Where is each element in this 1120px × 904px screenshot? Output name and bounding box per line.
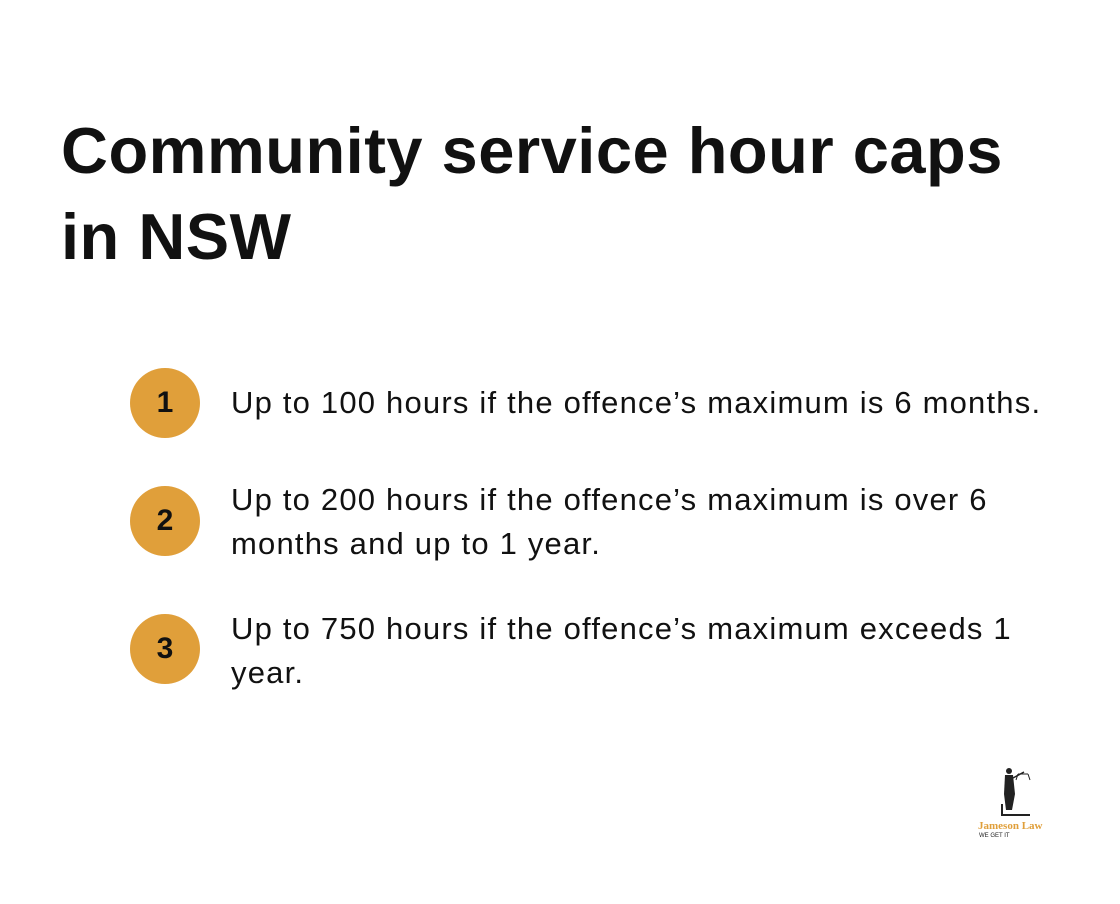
badge 2: 2 [157,504,173,537]
badge 3: 3 [157,632,173,665]
badge 1: 1 [157,386,173,419]
item 2 [130,482,988,561]
item 1 [130,368,1041,438]
title: Community service hour caps [61,114,1003,187]
badge 2 [130,486,200,556]
title [61,114,1003,273]
title: in NSW [61,200,291,273]
badge 1 [130,368,200,438]
icon: justice figure [1001,768,1030,816]
badge 3 [130,614,200,684]
text 3: Up to 750 hours if the offence’s maximum exceeds 1 year. [231,611,1012,690]
logo text: Jameson Law [978,820,1042,832]
logo: Jameson Law [978,768,1042,839]
text 2: Up to 200 hours if the offence’s maximum is over 6 months and up to 1 year. [231,482,988,561]
item 3 [130,611,1012,690]
logo: Jameson Law: WE GET IT [979,833,1010,839]
text 1: Up to 100 hours if the offence’s maximum is 6 months. [231,385,1041,420]
